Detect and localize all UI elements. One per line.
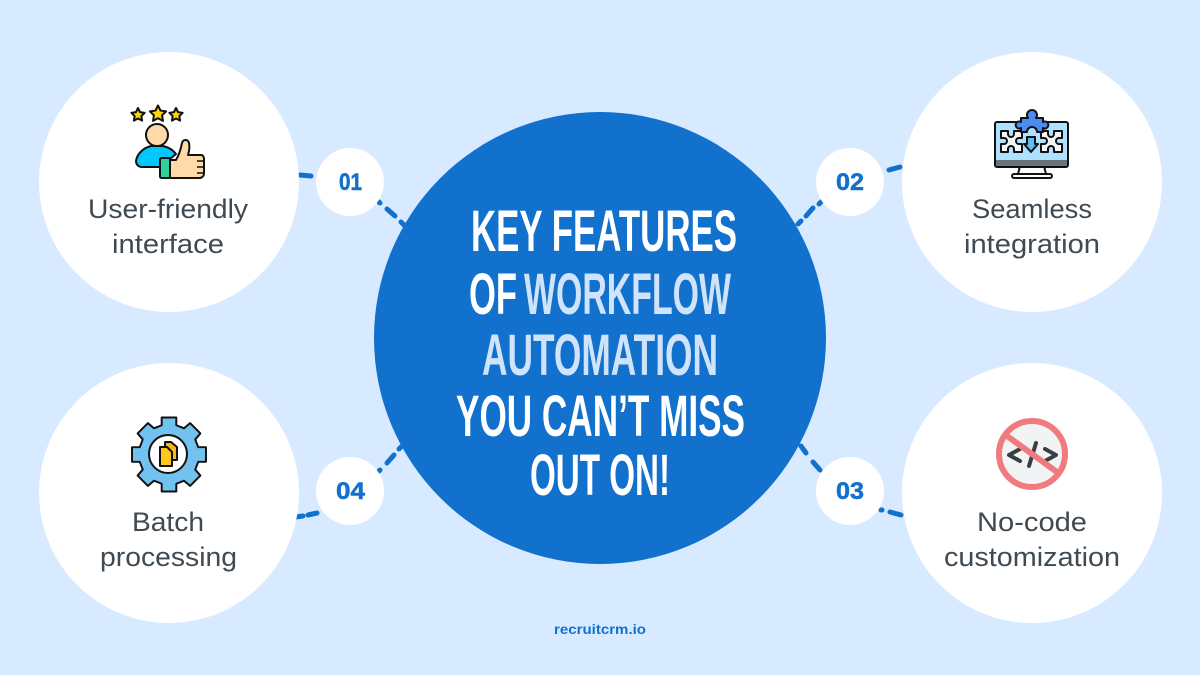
title: OF [469,262,517,327]
central circle [374,112,826,564]
icon: monitor with puzzle pieces [995,110,1068,178]
panel: batch processing [39,363,299,623]
badge: 02 [816,148,884,216]
label [100,507,237,572]
title [456,199,745,508]
label: Seamless [972,194,1092,224]
title: KEY FEATURES [471,199,737,264]
badge: 04: 04 [336,478,366,505]
badge: 04 [316,457,384,525]
title: OUT ON! [530,443,670,508]
label [944,507,1120,572]
icon: no code sign [999,421,1065,487]
badge: 03: 03 [836,478,864,505]
footer brand: recruitcrm.io [554,621,646,637]
label: integration [964,229,1100,259]
panel: seamless integration [902,52,1162,312]
panel: user-friendly interface [39,52,299,312]
connector: 01 [300,175,405,226]
badge: 02: 02 [836,169,864,196]
icon: user with thumbs up and stars [131,106,205,178]
badge: 01: 01 [339,169,362,196]
label: customization [944,542,1120,572]
label: No-code [977,507,1087,537]
connector: 03 [801,446,901,515]
label [964,194,1100,259]
label [88,194,249,259]
icon: gear with documents [132,418,206,491]
badge: 01 [316,148,384,216]
label: processing [100,542,237,572]
title: AUTOMATION [482,323,718,388]
panel: no-code customization [902,363,1162,623]
label: User-friendly [88,194,249,224]
title: YOU CAN’T MISS [456,384,745,449]
title: WORKFLOW [524,262,731,327]
connector: 02 [798,167,900,224]
badge: 03 [816,457,884,525]
label: Batch [132,507,204,537]
label: interface [112,229,224,259]
connector: 04 [296,445,403,517]
